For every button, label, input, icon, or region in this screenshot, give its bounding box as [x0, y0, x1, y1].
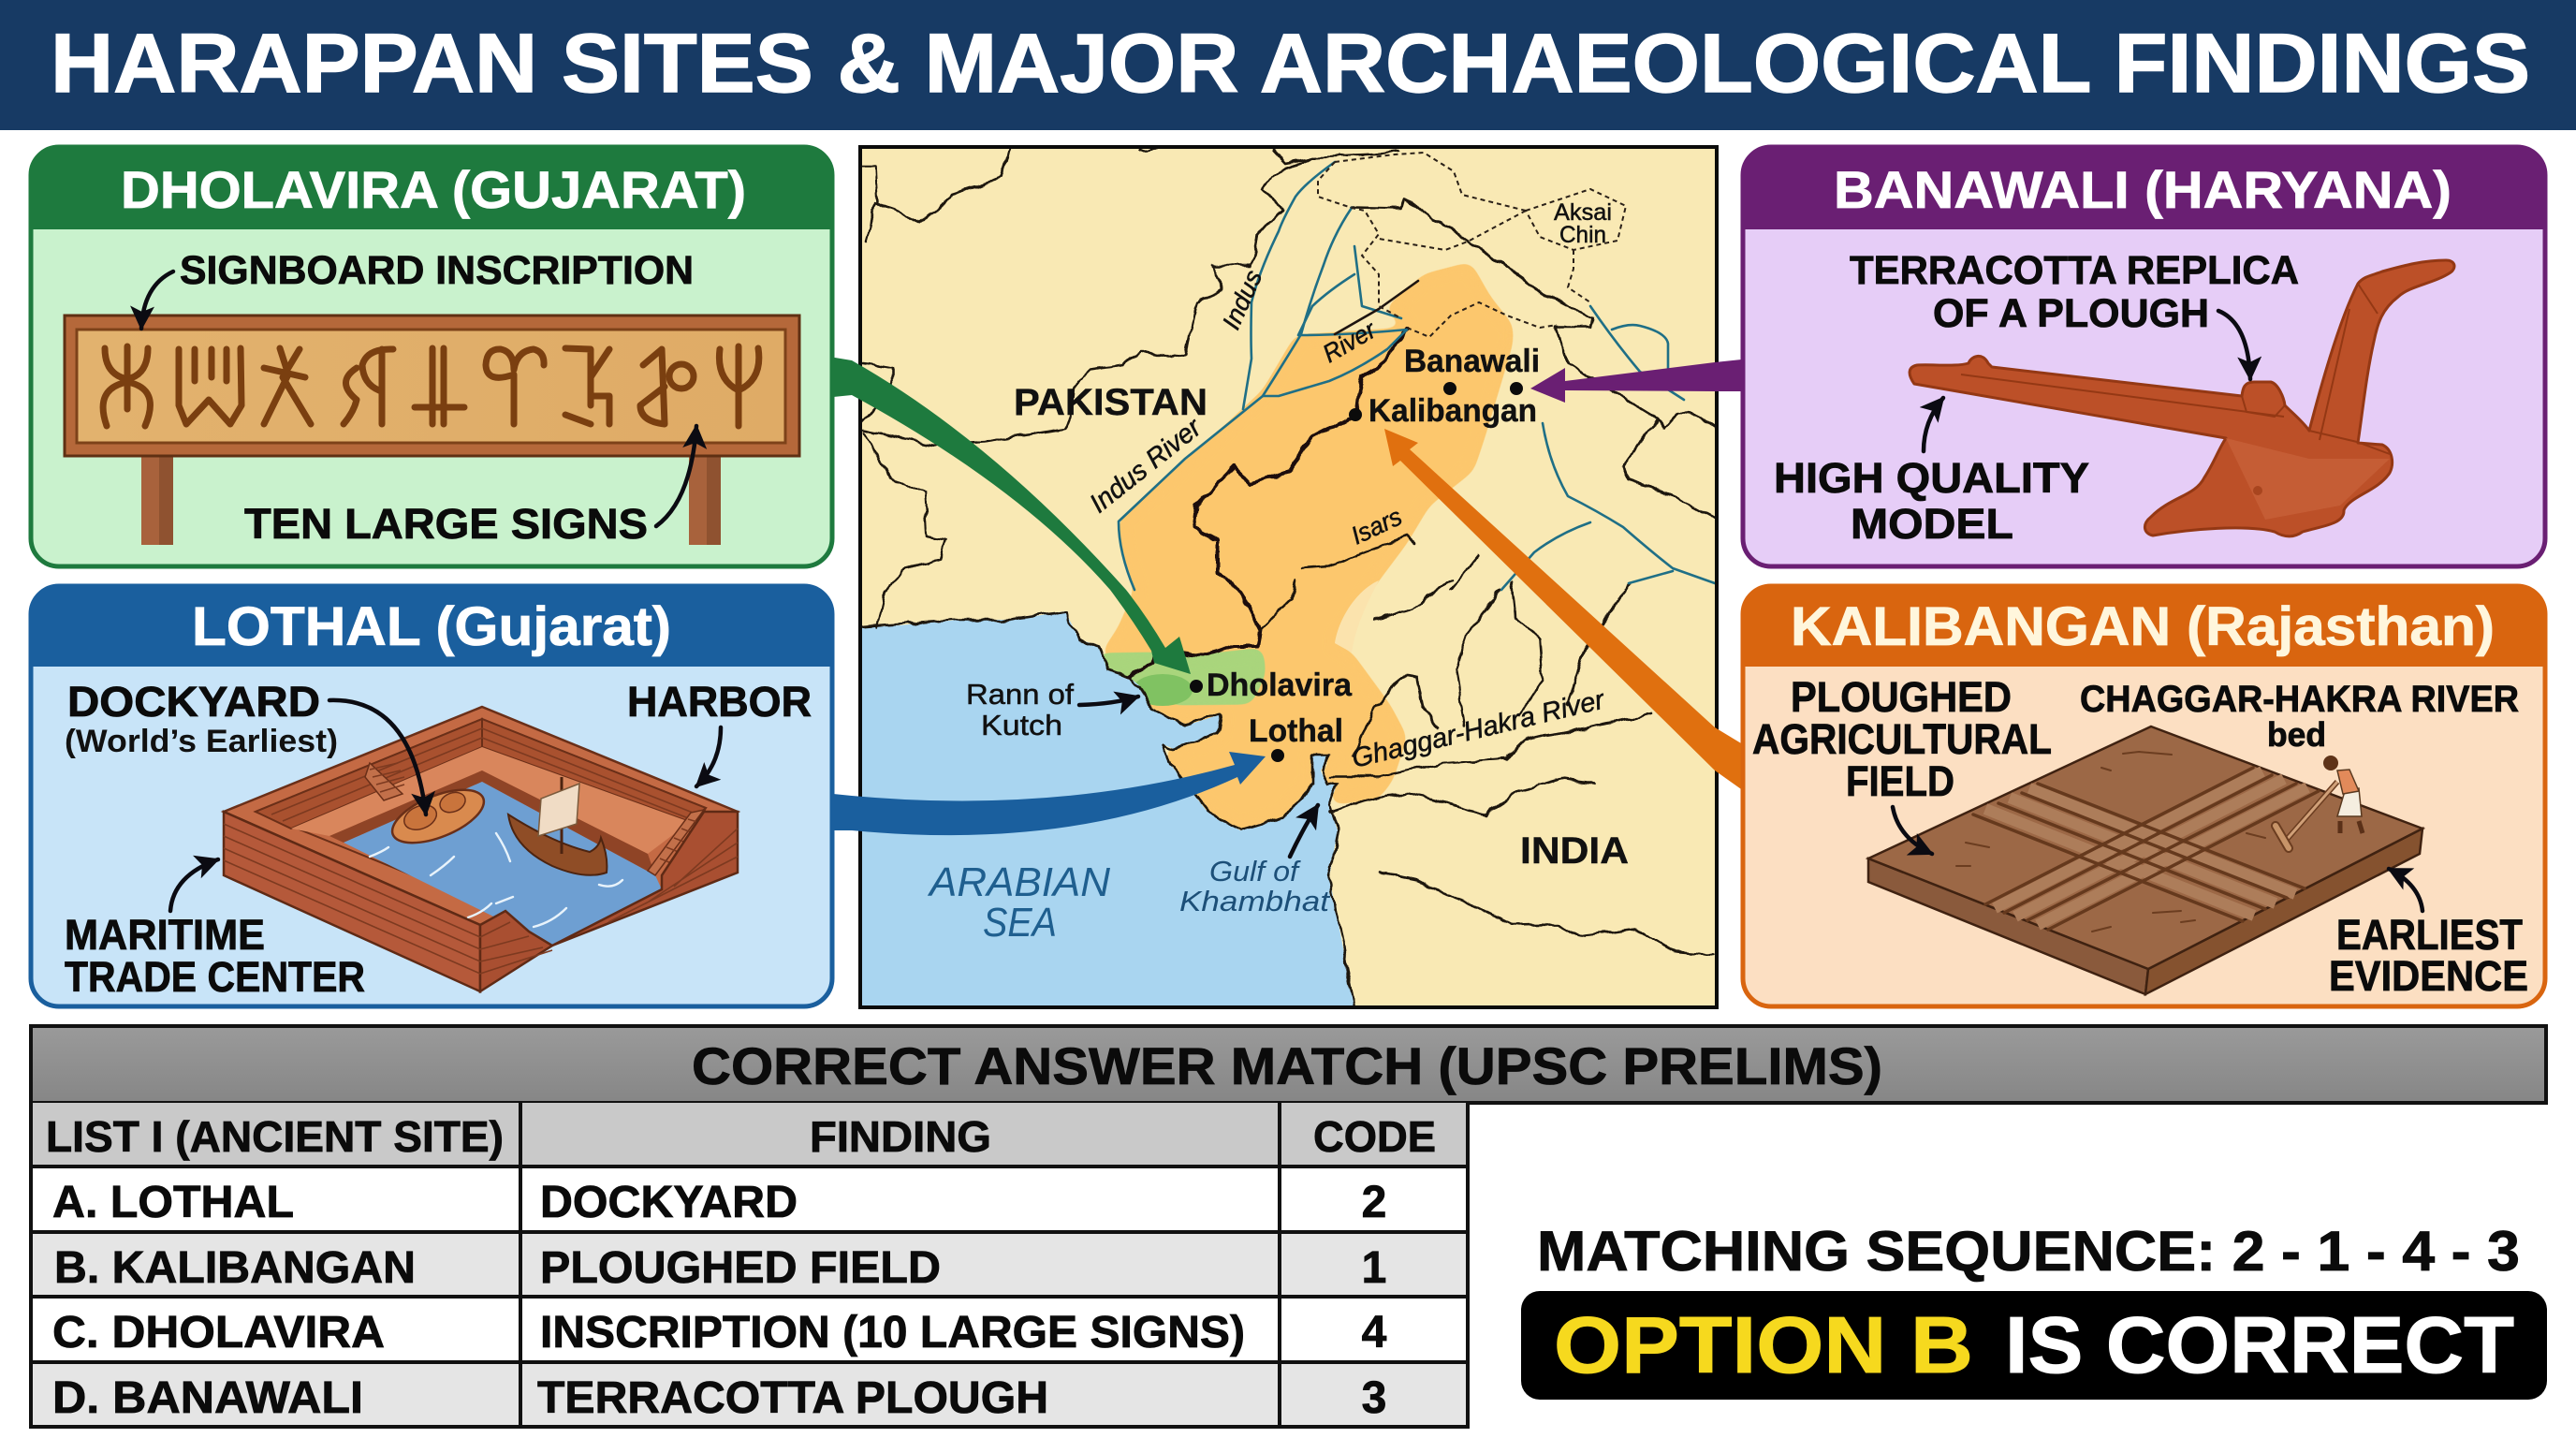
map labels: INDIA	[1520, 830, 1629, 872]
arrow: Dholavira panel to map	[824, 356, 1191, 674]
panel header: Kalibangan: KALIBANGAN (Rajasthan)	[1791, 596, 2495, 657]
Rann of Kutch dark patch	[1133, 674, 1193, 706]
label: earliest evidence	[2329, 869, 2528, 1000]
row: Lothal: 2	[1362, 1178, 1386, 1227]
map labels: Khambhat	[1179, 885, 1331, 917]
label: signboard inscription	[141, 248, 694, 329]
table column headers: FINDING	[810, 1112, 991, 1161]
row: Banawali: 3	[1362, 1373, 1386, 1423]
answer table	[31, 1026, 2546, 1427]
label: dockyard	[65, 678, 426, 814]
panel header: Dholavira	[29, 145, 834, 229]
table grid lines	[31, 1103, 1468, 1427]
map panel	[860, 147, 1717, 1007]
row: Dholavira: 4	[1362, 1308, 1387, 1357]
row: Dholavira	[31, 1297, 1468, 1362]
label: terracotta replica of a plough	[1850, 248, 2299, 379]
map labels: Lothal	[1249, 713, 1343, 749]
small moored boat	[386, 779, 490, 854]
table title bar: CORRECT ANSWER MATCH (UPSC PRELIMS)	[692, 1036, 1882, 1095]
water	[344, 782, 662, 946]
sailing boat	[508, 777, 607, 875]
label: chaggar-hakra river bed: bed	[2267, 715, 2326, 754]
label: ten large signs: TEN LARGE SIGNS	[244, 500, 648, 548]
stairs	[365, 763, 402, 800]
label: harbor: HARBOR	[627, 678, 812, 726]
row: Banawali: D. BANAWALI	[52, 1373, 363, 1423]
label: maritime trade center: TRADE CENTER	[65, 953, 365, 1001]
label: high quality model	[1774, 398, 2089, 548]
map callout arrows	[1079, 697, 1318, 857]
label: ploughed agricultural field: PLOUGHED	[1791, 673, 2012, 721]
map labels: Indus River	[1084, 412, 1208, 519]
label: ploughed agricultural field: AGRICULTURAL	[1752, 715, 2052, 763]
map labels: Ghaggar-Hakra River	[1349, 684, 1608, 774]
map labels: Chin	[1559, 222, 1606, 248]
farmer with plough	[2276, 756, 2363, 848]
map labels: Kalibangan	[1368, 393, 1537, 429]
state and country borders	[860, 150, 1715, 1006]
table column headers: CODE	[1313, 1112, 1436, 1161]
panel header: Lothal: LOTHAL (Gujarat)	[192, 596, 671, 657]
label: chaggar-hakra river bed: CHAGGAR-HAKRA RIVER	[2080, 679, 2519, 720]
row: Lothal	[31, 1167, 1468, 1232]
label: high quality model: HIGH QUALITY	[1774, 454, 2089, 502]
label: dockyard: DOCKYARD	[67, 678, 320, 726]
inscription glyphs	[103, 346, 759, 426]
signboard with ten signs	[65, 315, 799, 545]
title banner: HARAPPAN SITES & MAJOR ARCHAEOLOGICAL FINDINGS	[51, 16, 2530, 110]
answer banner: IS CORRECT	[2005, 1301, 2514, 1390]
panel: Banawali	[1741, 145, 2547, 566]
map labels: SEA	[983, 900, 1057, 946]
panel header: Banawali	[1741, 145, 2547, 229]
map labels: Dholavira	[1207, 668, 1353, 703]
disputed boundaries	[1318, 153, 1626, 337]
map labels	[927, 199, 1629, 946]
label: earliest evidence: EARLIEST	[2336, 911, 2523, 959]
label: terracotta replica of a plough: OF A PLOUGH	[1933, 291, 2209, 336]
answer banner	[1521, 1291, 2547, 1400]
sea area	[860, 611, 1354, 1006]
illustration: ploughed field	[1868, 726, 2422, 994]
Harappan extent shaded region	[1102, 262, 1513, 830]
panel: Kalibangan	[1741, 584, 2547, 1006]
row: Kalibangan: B. KALIBANGAN	[54, 1243, 416, 1293]
panel header: Kalibangan	[1741, 584, 2547, 667]
title banner	[0, 0, 2576, 130]
label: dockyard: (World’s Earliest)	[65, 724, 338, 759]
row: Kalibangan: PLOUGHED FIELD	[540, 1243, 941, 1293]
row: Dholavira: C. DHOLAVIRA	[52, 1308, 385, 1357]
illustration: terracotta plough	[1910, 260, 2454, 536]
map labels: River	[1318, 315, 1382, 368]
label: high quality model: MODEL	[1851, 500, 2013, 548]
outer walls	[224, 812, 480, 991]
map labels: Banawali	[1404, 344, 1540, 379]
pale streak in Rajasthan	[1335, 580, 1379, 653]
label: harbor	[627, 678, 812, 786]
map labels: Isars	[1347, 503, 1406, 550]
arrow: Lothal panel to map	[824, 752, 1266, 835]
label: ploughed agricultural field: FIELD	[1846, 757, 1954, 805]
illustration: dockyard basin	[224, 707, 738, 991]
arrow: Kalibangan panel to map	[1384, 429, 1750, 796]
map labels: Aksai	[1554, 199, 1612, 226]
panel: Lothal	[29, 584, 834, 1006]
row: Dholavira: INSCRIPTION (10 LARGE SIGNS)	[540, 1308, 1245, 1357]
map labels: PAKISTAN	[1014, 382, 1208, 423]
row: Lothal: A. LOTHAL	[52, 1178, 294, 1227]
panel: Dholavira	[29, 145, 834, 566]
arrow: Banawali panel to map	[1530, 359, 1750, 403]
map labels: Gulf of	[1209, 855, 1302, 888]
map labels: ARABIAN	[927, 859, 1110, 905]
site dots	[1190, 382, 1523, 762]
label: ploughed agricultural field	[1752, 673, 2052, 854]
panel header: Lothal	[29, 584, 834, 667]
Dholavira green region	[1095, 648, 1266, 705]
row: Kalibangan: 1	[1362, 1243, 1386, 1293]
label: terracotta replica of a plough: TERRACOTTA REPLICA	[1850, 248, 2299, 293]
label: chaggar-hakra river bed	[2080, 679, 2519, 754]
label: signboard inscription: SIGNBOARD INSCRIPTION	[180, 248, 694, 293]
map labels: Kutch	[981, 709, 1062, 741]
label: earliest evidence: EVIDENCE	[2329, 952, 2528, 1000]
label: ten large signs	[244, 426, 696, 548]
map labels: Indus	[1217, 266, 1267, 333]
label: maritime trade center	[65, 859, 365, 1001]
label: maritime trade center: MARITIME	[65, 911, 265, 959]
panel header: Dholavira: DHOLAVIRA (GUJARAT)	[121, 160, 746, 219]
row: Banawali	[31, 1362, 1468, 1427]
answer banner: OPTION B	[1554, 1301, 1973, 1390]
matching sequence text: MATCHING SEQUENCE: 2 - 1 - 4 - 3	[1537, 1220, 2520, 1283]
table column headers	[31, 1103, 1468, 1167]
table column headers: LIST I (ANCIENT SITE)	[46, 1112, 504, 1161]
table title bar	[31, 1026, 2546, 1103]
furrows	[1973, 768, 2319, 930]
rivers	[1119, 162, 1715, 590]
map labels: Rann of	[966, 678, 1074, 711]
row: Lothal: DOCKYARD	[540, 1178, 798, 1227]
panel header: Banawali: BANAWALI (HARYANA)	[1834, 160, 2452, 219]
map frame	[860, 147, 1717, 1007]
row: Banawali: TERRACOTTA PLOUGH	[537, 1373, 1048, 1423]
row: Kalibangan	[31, 1232, 1468, 1297]
